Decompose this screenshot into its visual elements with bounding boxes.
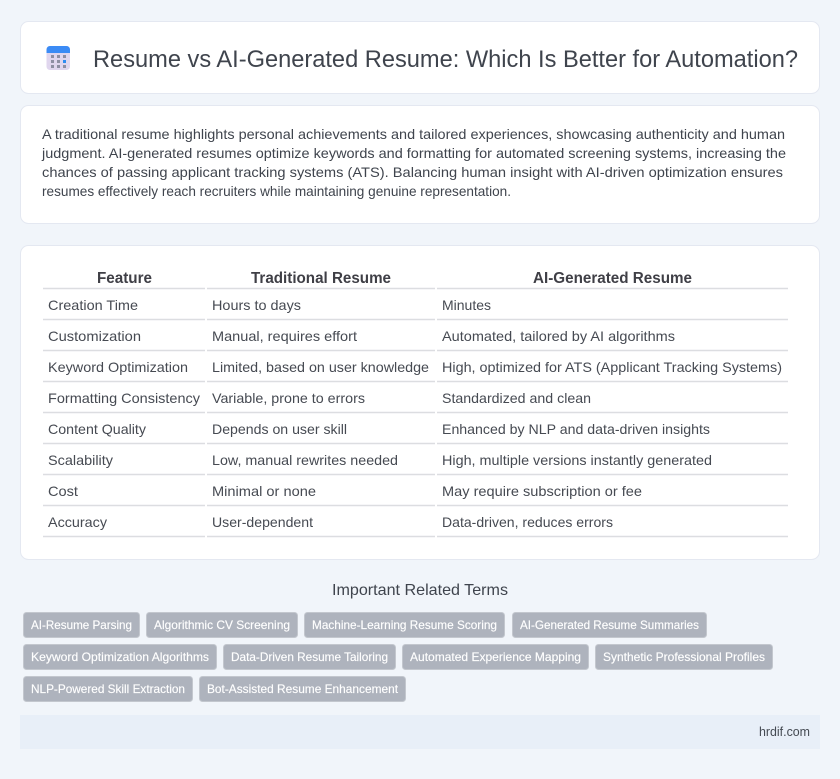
row: cost: May require subscription or fee	[442, 483, 642, 499]
tag: Keyword Optimization Algorithms	[31, 650, 209, 664]
row: scalability: High, multiple versions instantly generated	[442, 452, 712, 468]
header card	[20, 22, 820, 94]
row: formatting consistency	[48, 390, 591, 406]
row: content quality	[48, 421, 710, 437]
intro text: chances of passing applicant tracking systems (ATS). Balancing human insight with AI-driven optimization ensures	[42, 164, 783, 180]
tag: NLP-Powered Skill Extraction	[31, 682, 185, 696]
tag: Bot-Assisted Resume Enhancement	[207, 682, 399, 696]
tag	[146, 612, 298, 638]
tag: Synthetic Professional Profiles	[603, 650, 765, 664]
row: scalability: Scalability	[48, 452, 113, 468]
icon: calendar	[46, 46, 70, 70]
intro text	[41, 126, 786, 199]
row: accuracy: Data-driven, reduces errors	[442, 514, 613, 530]
row: content quality: Enhanced by NLP and data-driven insights	[442, 421, 710, 437]
comparison table panel	[20, 246, 820, 560]
related terms heading: Important Related Terms	[332, 582, 508, 599]
row: cost	[48, 483, 642, 499]
tag	[200, 676, 406, 702]
intro text: A traditional resume highlights personal achievements and tailored experiences, showcasing authenticity and human	[42, 126, 785, 142]
row: cost: Minimal or none	[212, 483, 316, 499]
tag: Machine-Learning Resume Scoring	[312, 618, 497, 632]
row: creation time: Creation Time	[48, 297, 138, 313]
row: accuracy: User-dependent	[212, 514, 313, 530]
tag	[24, 612, 140, 638]
tag	[304, 612, 504, 638]
row: accuracy	[48, 514, 613, 530]
row: keyword optimization: High, optimized for ATS (Applicant Tracking Systems)	[442, 359, 782, 375]
intro text: judgment. AI-generated resumes optimize keywords and formatting for automated screening systems, increasing the	[41, 145, 786, 161]
table header: Feature	[97, 270, 152, 287]
table header	[97, 270, 692, 287]
intro text: resumes effectively reach recruiters while maintaining genuine representation.	[42, 183, 511, 199]
row: formatting consistency: Standardized and clean	[442, 390, 591, 406]
row: customization: Manual, requires effort	[212, 328, 357, 344]
row: customization	[48, 328, 675, 344]
tag: AI-Generated Resume Summaries	[520, 618, 699, 632]
tag: Data-Driven Resume Tailoring	[231, 650, 388, 664]
tag	[402, 644, 588, 670]
title: Resume vs AI-Generated Resume: Which Is Better for Automation?	[93, 46, 798, 73]
row: keyword optimization	[48, 359, 782, 375]
tag	[24, 676, 192, 702]
row: keyword optimization: Limited, based on user knowledge	[212, 359, 429, 375]
row: creation time: Minutes	[442, 297, 491, 313]
row: keyword optimization: Keyword Optimization	[48, 359, 188, 375]
tag	[24, 644, 216, 670]
row: creation time: Hours to days	[212, 297, 301, 313]
row: content quality: Content Quality	[48, 421, 146, 437]
tag: AI-Resume Parsing	[31, 618, 132, 632]
row: customization: Customization	[48, 328, 141, 344]
tag: Automated Experience Mapping	[410, 650, 581, 664]
tag	[512, 612, 706, 638]
row: formatting consistency: Variable, prone to errors	[212, 390, 365, 406]
tag	[596, 644, 772, 670]
footer: hrdif.com	[759, 725, 810, 739]
row: scalability: Low, manual rewrites needed	[212, 452, 398, 468]
tag: Algorithmic CV Screening	[154, 618, 290, 632]
row: creation time	[48, 297, 491, 313]
row: accuracy: Accuracy	[48, 514, 107, 530]
row: cost: Cost	[48, 483, 78, 499]
table header: Traditional Resume	[251, 270, 391, 287]
intro panel	[20, 106, 820, 224]
row: customization: Automated, tailored by AI algorithms	[442, 328, 675, 344]
row: scalability	[48, 452, 712, 468]
row: content quality: Depends on user skill	[212, 421, 347, 437]
table header: AI-Generated Resume	[533, 270, 692, 287]
related terms tags	[24, 612, 772, 702]
tag	[224, 644, 396, 670]
footer	[20, 715, 820, 749]
row: formatting consistency: Formatting Consistency	[48, 390, 200, 406]
